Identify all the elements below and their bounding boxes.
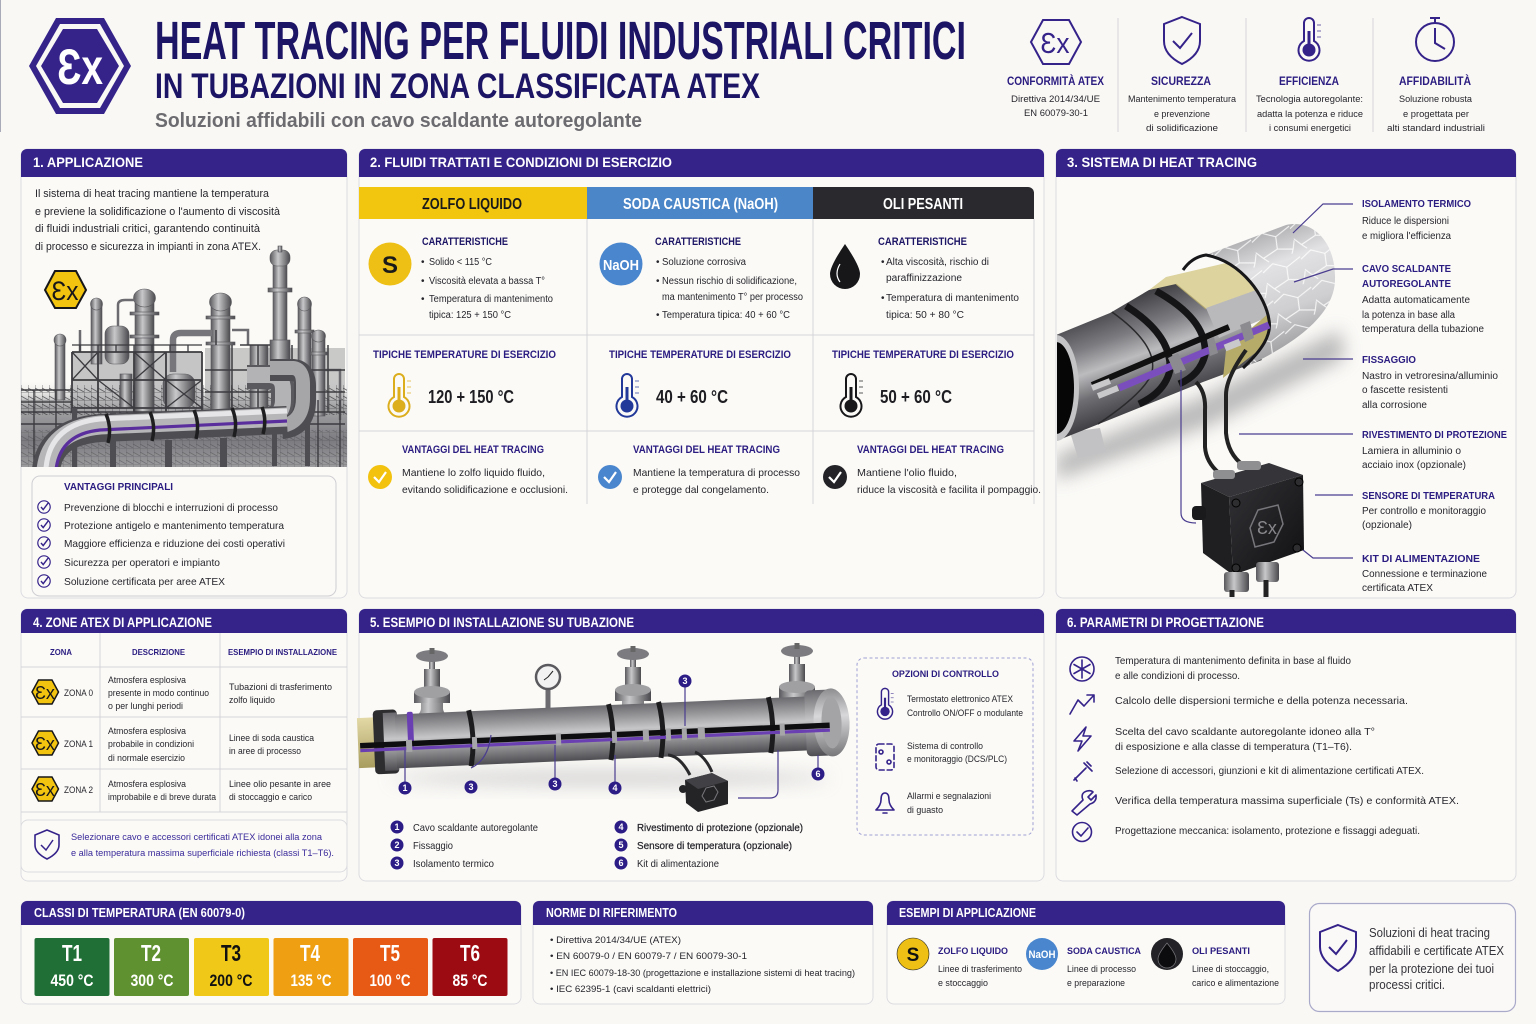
number marker 1: 1 [402, 783, 408, 793]
row: zona 0 [32, 675, 332, 711]
column: zolfo liquido: Temperatura di mantenimento [429, 294, 553, 305]
parameter: scelta cavo: Scelta del cavo scaldante autoregolante idoneo alla T° [1115, 726, 1375, 738]
column: zolfo liquido: ZOLFO LIQUIDO [422, 196, 522, 213]
column: zolfo liquido: VANTAGGI DEL HEAT TRACING [402, 444, 544, 456]
heading: applicazione: 1. APPLICAZIONE [33, 154, 143, 170]
parameter: calcolo dispersioni [1070, 695, 1408, 714]
column: oli pesanti: OLI PESANTI [883, 196, 963, 213]
markers on pipe: 3 [468, 782, 474, 792]
badge: conformità ATEX: CONFORMITÀ ATEX [1007, 73, 1104, 88]
list: norme [550, 935, 855, 994]
column: oli pesanti: paraffinizzazione [886, 273, 962, 284]
labels: system components: AUTOREGOLANTE [1362, 278, 1451, 290]
column: soda caustica: Mantiene la temperatura di processo [633, 467, 800, 479]
labels: system components: Per controllo e monitoraggio [1362, 506, 1486, 517]
class T6 [432, 938, 508, 996]
column: soda caustica: Nessun rischio di solidificazione, [662, 276, 797, 287]
panel: 6. parametri di progettazione [1056, 609, 1516, 881]
box: vantaggi principali: VANTAGGI PRINCIPALI [64, 481, 173, 493]
box: opzioni di controllo: Sistema di controllo [907, 741, 983, 751]
illustration: installed pipe [357, 643, 851, 812]
badge: sicurezza [1128, 17, 1236, 133]
panel: 5. esempio di installazione [357, 609, 1044, 881]
junction box [1192, 461, 1304, 600]
labels: system components: KIT DI ALIMENTAZIONE [1362, 553, 1480, 565]
legend: components: Rivestimento di protezione (opzionale) [637, 822, 803, 834]
labels: system components: alla corrosione [1362, 400, 1427, 411]
main pipe [46, 368, 305, 470]
example: oli: OLI PESANTI [1192, 946, 1250, 957]
heading: esempi: ESEMPI DI APPLICAZIONE [899, 906, 1036, 920]
box: vantaggi principali: Protezione antigelo e mantenimento temperatura [64, 520, 284, 532]
parameter: scelta cavo: di esposizione e alla classe di temperatura (T1–T6). [1115, 741, 1352, 753]
box: vantaggi principali: Maggiore efficienza e riduzione dei costi operativi [64, 538, 285, 550]
title: HEAT TRACING PER FLUIDI INDUSTRIALI CRITICI [155, 11, 966, 71]
junction box: Ɛx [1257, 518, 1277, 538]
leader lines [405, 687, 818, 798]
example: zolfo: S [907, 945, 919, 966]
list: norme: • EN IEC 60079-18-30 (progettazione e installazione sistemi di heat tracing) [550, 968, 855, 978]
legend: components: 3 [394, 858, 400, 868]
callout: soluzioni certificate: Soluzioni di heat tracing [1369, 926, 1490, 940]
labels: system components: Connessione e terminazione [1362, 569, 1487, 580]
heading: esempio: 5. ESEMPIO DI INSTALLAZIONE SU TUBAZIONE [370, 614, 634, 630]
steel frames [21, 330, 345, 470]
number marker 1 [398, 782, 412, 794]
column: oli pesanti: tipica: 50 + 80 °C [886, 310, 964, 321]
text block: intro [35, 188, 281, 253]
callout: certificazione [21, 820, 347, 872]
junction box [679, 773, 728, 812]
class T6: T6 [460, 940, 480, 966]
legend: components: 2 [394, 840, 400, 850]
text block: intro: e previene la solidificazione o l'aumento di viscosità [35, 206, 281, 218]
column: zolfo liquido: • [421, 276, 425, 287]
column: soda caustica: Temperatura tipica: 40 + 60 °C [662, 310, 790, 321]
badge: sicurezza: SICUREZZA [1151, 74, 1211, 88]
parameter: mantenimento: e alle condizioni di processo. [1115, 670, 1240, 682]
class T2 [114, 938, 189, 996]
column: zolfo liquido: CARATTERISTICHE [422, 236, 508, 248]
row: zona 0: ZONA 0 [64, 688, 93, 698]
column: oli pesanti: • [881, 257, 885, 268]
legend: components: 1 [394, 822, 400, 832]
column: oli pesanti: CARATTERISTICHE [878, 236, 967, 248]
row: zona 2 [32, 777, 331, 802]
column: oli pesanti [813, 187, 1041, 496]
column: soda caustica [587, 187, 813, 496]
row: zona 0: Tubazioni di trasferimento [229, 682, 332, 692]
parameter: verifica [1072, 791, 1459, 815]
labels: system components: certificata ATEX [1362, 583, 1433, 594]
heading: fluidi: 2. FLUIDI TRATTATI E CONDIZIONI DI ESERCIZIO [370, 154, 672, 170]
badge: affidabilità: AFFIDABILITÀ [1399, 73, 1471, 88]
box: opzioni di controllo: Controllo ON/OFF o modulante [907, 708, 1023, 718]
class T1: T1 [62, 940, 82, 966]
legend: components: 5 [618, 840, 624, 850]
row: zona 0: Ɛx [35, 683, 55, 703]
column: oli pesanti: • [881, 293, 885, 304]
example: oli: carico e alimentazione [1192, 978, 1279, 988]
heading: classi: CLASSI DI TEMPERATURA (EN 60079-0) [34, 906, 245, 920]
badge: sicurezza: e prevenzione [1154, 109, 1210, 119]
row: zona 0: o per lunghi periodi [108, 701, 183, 711]
legend: components: Sensore di temperatura (opzionale) [637, 840, 792, 852]
row: zona 2: di stoccaggio e carico [229, 792, 312, 802]
class T4 [274, 938, 348, 996]
panel: classi di temperatura [21, 901, 521, 1004]
row: zona 0: zolfo liquido [229, 695, 275, 705]
parameter: mantenimento [1070, 655, 1351, 682]
parameter: scelta cavo [1074, 726, 1375, 753]
badge: efficienza: i consumi energetici [1269, 123, 1351, 133]
markers on pipe: 3 [552, 779, 558, 789]
row: zona 1 [32, 726, 314, 763]
callout: soluzioni certificate: affidabili e certificate ATEX [1369, 944, 1505, 958]
heading: parametri: 6. PARAMETRI DI PROGETTAZIONE [1067, 614, 1264, 630]
callout lines [1181, 204, 1353, 558]
badge: affidabilità: alti standard industriali [1387, 123, 1485, 133]
column: soda caustica: • [656, 257, 660, 268]
icon: Ex logo hexagon: Ɛx [57, 39, 103, 95]
row: zona 2: ZONA 2 [64, 785, 93, 795]
list: norme: • IEC 62395-1 (cavi scaldanti elettrici) [550, 984, 711, 994]
example: zolfo [897, 938, 1022, 988]
panel: 3. sistema di heat tracing [1033, 149, 1516, 600]
panel: esempi di applicazione [887, 901, 1285, 1004]
column: soda caustica: CARATTERISTICHE [655, 236, 741, 248]
tagline: Soluzioni affidabili con cavo scaldante autoregolante [155, 110, 642, 132]
legend: components: Cavo scaldante autoregolante [413, 822, 538, 834]
row: zona 1: di normale esercizio [108, 753, 185, 763]
badge: affidabilità: e progettata per [1403, 109, 1469, 119]
class T4: 135 °C [290, 971, 332, 990]
column: oli pesanti: Temperatura di mantenimento [886, 293, 1019, 304]
gauge [536, 665, 560, 708]
example: zolfo: Linee di trasferimento [938, 964, 1022, 974]
labels: system components: o fascette resistenti [1362, 385, 1448, 396]
example: zolfo: e stoccaggio [938, 978, 988, 988]
heading: sistema: 3. SISTEMA DI HEAT TRACING [1067, 154, 1257, 170]
column: oli pesanti: Mantiene l'olio fluido, [857, 467, 957, 479]
box: vantaggi principali: Soluzione certificata per aree ATEX [64, 576, 225, 588]
column: soda caustica: VANTAGGI DEL HEAT TRACING [633, 444, 780, 456]
legend: components: Kit di alimentazione [637, 858, 719, 870]
column: soda caustica: SODA CAUSTICA (NaOH) [623, 196, 778, 213]
column: zolfo liquido: • [421, 294, 425, 305]
column: zolfo liquido: 120 + 150 °C [428, 387, 514, 407]
text block: intro: di fluidi industriali critici, garantendo continuità [35, 223, 261, 235]
column: zolfo liquido: Viscosità elevata a bassa T° [429, 276, 545, 287]
column: oli pesanti: Alta viscosità, rischio di [886, 257, 989, 268]
heading: zone: 4. ZONE ATEX DI APPLICAZIONE [33, 614, 212, 630]
class T4: T4 [300, 940, 320, 966]
column: oli pesanti: TIPICHE TEMPERATURE DI ESERCIZIO [832, 349, 1014, 361]
box: opzioni di controllo: Termostato elettronico ATEX [907, 694, 1013, 704]
badge: efficienza [1256, 18, 1363, 133]
parameter: mantenimento: Temperatura di mantenimento definita in base al fluido [1115, 655, 1351, 667]
table: zone ATEX: ZONA [50, 647, 72, 657]
column: oli pesanti: VANTAGGI DEL HEAT TRACING [857, 444, 1004, 456]
column: soda caustica: TIPICHE TEMPERATURE DI ESERCIZIO [609, 349, 791, 361]
column: zolfo liquido: evitando solidificazione e occlusioni. [402, 484, 568, 496]
legend: components: 6 [618, 858, 624, 868]
example: oli [1151, 938, 1279, 988]
row: zona 2: improbabile e di breve durata [108, 792, 216, 802]
heading: norme: NORME DI RIFERIMENTO [546, 906, 677, 920]
labels: system components: Lamiera in alluminio o [1362, 446, 1461, 457]
labels: system components: Nastro in vetroresina/alluminio [1362, 371, 1498, 382]
badge: conformità ATEX: EN 60079-30-1 [1024, 108, 1088, 118]
badge: conformità ATEX [1007, 20, 1104, 118]
column: soda caustica: • [656, 276, 660, 287]
column: zolfo liquido: Solido < 115 °C [429, 257, 492, 268]
column: oli pesanti: riduce la viscosità e facilita il pompaggio. [857, 484, 1041, 496]
panel: 2. fluidi trattati [359, 149, 1044, 598]
markers on pipe: 4 [612, 783, 618, 793]
legend: components: Isolamento termico [413, 858, 494, 870]
power cables [668, 752, 712, 775]
badge: efficienza: adatta la potenza e riduce [1257, 109, 1363, 119]
column: soda caustica: e protegge dal congelamento. [633, 484, 769, 496]
steel pipe [1057, 284, 1262, 441]
illustration: refinery [21, 246, 347, 470]
box: opzioni di controllo: e monitoraggio (DCS/PLC) [907, 754, 1007, 764]
column: soda caustica: Soluzione corrosiva [662, 257, 746, 268]
box: vantaggi principali [32, 476, 336, 596]
row: zona 1: probabile in condizioni [108, 739, 194, 749]
columns [54, 246, 327, 416]
markers on pipe [464, 674, 824, 794]
column: zolfo liquido: Mantiene lo zolfo liquido fluido, [402, 467, 545, 479]
list: norme: • EN 60079-0 / EN 60079-7 / EN 60079-30-1 [550, 951, 747, 961]
class T2: T2 [141, 940, 161, 966]
column: soda caustica: • [656, 310, 660, 321]
table: zone ATEX [21, 633, 347, 812]
legend: components: 4 [618, 822, 624, 832]
parameter: progettazione meccanica: Progettazione meccanica: isolamento, protezione e fissaggi adeguati. [1115, 825, 1420, 837]
callout: soluzioni certificate: per la protezione dei tuoi [1369, 962, 1494, 976]
column: soda caustica: ma mantenimento T° per processo [662, 292, 803, 303]
box: opzioni di controllo: OPZIONI DI CONTROLLO [892, 669, 999, 680]
row: zona 1: Atmosfera esplosiva [108, 726, 186, 736]
row: zona 2: Ɛx [35, 780, 55, 800]
outer jacket [1183, 224, 1335, 368]
box: opzioni di controllo: di guasto [907, 805, 943, 815]
labels: system components: Adatta automaticamente [1362, 295, 1470, 306]
column: zolfo liquido: S [382, 252, 398, 279]
labels: system components: FISSAGGIO [1362, 354, 1416, 366]
badge: sicurezza: di solidificazione [1146, 123, 1218, 133]
panel: 4. zone ATEX [21, 609, 347, 881]
parameter: calcolo dispersioni: Calcolo delle dispersioni termiche e della potenza necessaria. [1115, 695, 1408, 707]
legend: components [390, 820, 803, 870]
class T6: 85 °C [452, 971, 488, 990]
box: opzioni di controllo [857, 658, 1033, 835]
column: zolfo liquido: tipica: 125 + 150 °C [429, 310, 511, 321]
heating cable [1092, 321, 1269, 396]
panel: 1. applicazione [21, 149, 347, 598]
icon: Ex logo hexagon [29, 18, 131, 114]
badge: conformità ATEX: Ɛx [1040, 28, 1070, 60]
text block: intro: Il sistema di heat tracing mantiene la temperatura [35, 188, 270, 200]
box: opzioni di controllo: Allarmi e segnalazioni [907, 791, 991, 801]
example: soda: e preparazione [1067, 978, 1125, 988]
parameter: progettazione meccanica [1072, 822, 1420, 842]
list: norme: • Direttiva 2014/34/UE (ATEX) [550, 935, 681, 945]
box: vantaggi principali: Sicurezza per operatori e impianto [64, 557, 220, 569]
class T1: 450 °C [50, 971, 94, 990]
row: zona 1: Ɛx [35, 734, 55, 754]
column: soda caustica: 40 + 60 °C [656, 387, 728, 407]
column: zolfo liquido: TIPICHE TEMPERATURE DI ESERCIZIO [373, 349, 556, 361]
example: zolfo: ZOLFO LIQUIDO [938, 946, 1008, 957]
example: soda [1026, 938, 1141, 988]
class T3: T3 [221, 940, 241, 966]
row: zona 0: presente in modo continuo [108, 688, 209, 698]
markers on pipe: 3 [682, 676, 688, 686]
column: zolfo liquido: • [421, 257, 425, 268]
shadow and support [1056, 330, 1345, 480]
callout: soluzioni certificate: processi critici. [1369, 978, 1445, 992]
example: oli: Linee di stoccaggio, [1192, 964, 1269, 974]
column: soda caustica: NaOH [603, 257, 639, 274]
labels: system components [1362, 198, 1507, 594]
class T3 [194, 938, 269, 996]
badge: efficienza: Tecnologia autoregolante: [1256, 94, 1363, 104]
class T1 [34, 938, 110, 996]
power cables [1196, 382, 1219, 473]
example: soda: NaOH [1028, 949, 1056, 961]
parameter: accessori [1074, 762, 1424, 781]
header badges [1007, 17, 1485, 133]
pipe run [357, 688, 851, 777]
callout: certificazione: Selezionare cavo e accessori certificati ATEX idonei alla zona [71, 832, 322, 842]
column: zolfo liquido [359, 187, 587, 496]
badge: sicurezza: Mantenimento temperatura [1128, 94, 1236, 104]
labels: system components: (opzionale) [1362, 520, 1412, 531]
row: zona 1: in aree di processo [229, 746, 301, 756]
icon: yellow Ex hexagon: Ɛx [52, 276, 79, 306]
illustration: pipe cutaway [1033, 204, 1353, 600]
table: zone ATEX: ESEMPIO DI INSTALLAZIONE [228, 647, 337, 657]
labels: system components: e migliora l'efficienza [1362, 231, 1451, 242]
box: vantaggi principali: Prevenzione di blocchi e interruzioni di processo [64, 502, 278, 514]
column: oli pesanti: 50 + 60 °C [880, 387, 952, 407]
row: zona 2: Linee olio pesante in aree [229, 779, 331, 789]
labels: system components: Riduce le dispersioni [1362, 216, 1449, 227]
row: zona 1: ZONA 1 [64, 739, 93, 749]
row: zona 0: Atmosfera esplosiva [108, 675, 186, 685]
class T5: T5 [380, 940, 400, 966]
table: zone ATEX: DESCRIZIONE [132, 647, 185, 657]
class T2: 300 °C [130, 971, 174, 990]
markers on pipe: 6 [815, 769, 821, 779]
badge: affidabilità [1387, 18, 1485, 133]
example: soda: SODA CAUSTICA [1067, 946, 1141, 957]
class T5: 100 °C [370, 971, 410, 990]
text block: intro: di processo e sicurezza in impianti in zona ATEX. [35, 241, 261, 253]
badge: conformità ATEX: Direttiva 2014/34/UE [1011, 94, 1100, 104]
parameter: accessori: Selezione di accessori, giunzioni e kit di alimentazione certificati ATEX. [1115, 765, 1424, 777]
subtitle: IN TUBAZIONI IN ZONA CLASSIFICATA ATEX [155, 67, 761, 106]
callout: soluzioni certificate [1310, 904, 1516, 1012]
callout: certificazione: e alla temperatura massima superficiale richiesta (classi T1–T6). [71, 848, 334, 858]
labels: system components: temperatura della tubazione [1362, 324, 1484, 335]
labels: system components: ISOLAMENTO TERMICO [1362, 198, 1471, 210]
panel: norme di riferimento [533, 901, 873, 1004]
class T5 [353, 938, 428, 996]
class T3: 200 °C [210, 971, 252, 990]
labels: system components: SENSORE DI TEMPERATURA [1362, 490, 1495, 502]
example: soda: Linee di processo [1067, 964, 1136, 974]
labels: system components: la potenza in base alla [1362, 310, 1455, 321]
parameter: verifica: Verifica della temperatura massima superficiale (Ts) e conformità ATEX. [1115, 795, 1459, 807]
labels: system components: CAVO SCALDANTE [1362, 263, 1451, 275]
row: zona 1: Linee di soda caustica [229, 733, 314, 743]
labels: system components: RIVESTIMENTO DI PROTEZIONE [1362, 429, 1507, 441]
row: zona 2: Atmosfera esplosiva [108, 779, 186, 789]
icon: yellow Ex hexagon [45, 271, 86, 308]
insulation layers [1149, 263, 1270, 378]
legend: components: Fissaggio [413, 840, 453, 852]
badge: efficienza: EFFICIENZA [1279, 74, 1339, 88]
badge: affidabilità: Soluzione robusta [1399, 94, 1472, 104]
labels: system components: acciaio inox (opzionale) [1362, 460, 1466, 471]
